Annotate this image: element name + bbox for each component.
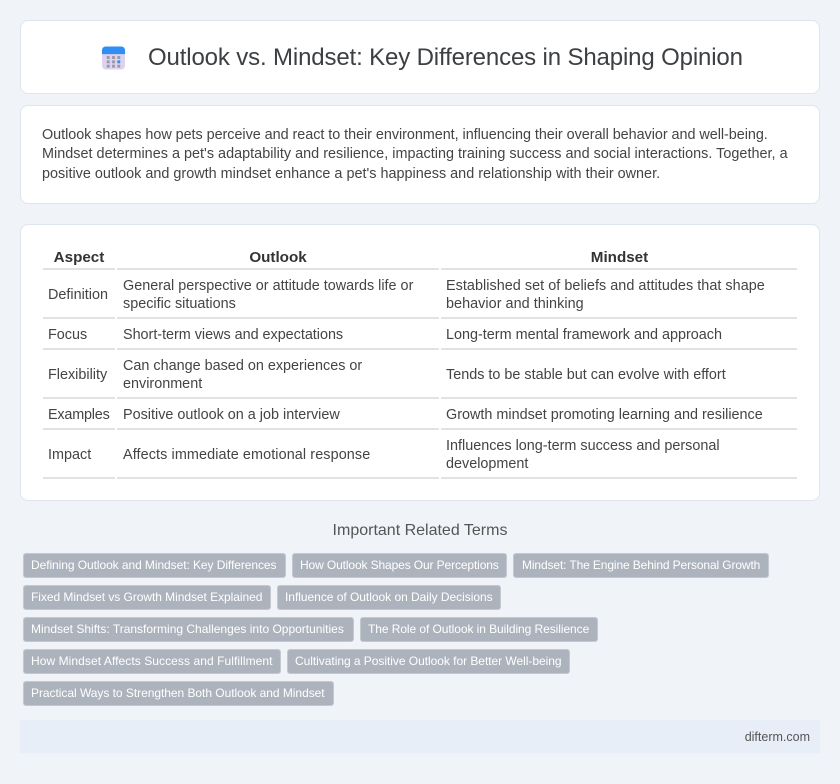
table rows: Short-term views and expectations: [123, 327, 343, 343]
table rows: Examples: [48, 407, 110, 423]
related term tags: Fixed Mindset vs Growth Mindset Explained: [31, 590, 262, 604]
table header: Aspect: [54, 249, 104, 266]
footer bar: [20, 720, 820, 753]
description text: [42, 127, 788, 182]
table rows: specific situations: [123, 296, 236, 312]
related term tags: Influence of Outlook on Daily Decisions: [285, 590, 493, 604]
table rows: Established set of beliefs and attitudes that shape: [446, 278, 765, 294]
related term tags: How Mindset Affects Success and Fulfillment: [31, 654, 273, 668]
related term tags: The Role of Outlook in Building Resilience: [368, 622, 589, 636]
table rows: Long-term mental framework and approach: [446, 327, 722, 343]
icon: calendar: [102, 46, 126, 70]
related term tags: Mindset: The Engine Behind Personal Growth: [522, 558, 760, 572]
table header: [54, 249, 648, 266]
table rows: Influences long-term success and personal: [446, 438, 720, 454]
related terms heading: Important Related Terms: [333, 522, 507, 539]
title: Outlook vs. Mindset: Key Differences in Shaping Opinion: [148, 44, 743, 71]
comparison table panel: [20, 224, 820, 501]
description panel: [20, 105, 820, 204]
table rows: Tends to be stable but can evolve with effort: [446, 367, 726, 383]
table rows: environment: [123, 376, 202, 392]
table rows: Positive outlook on a job interview: [123, 407, 340, 423]
table rows: development: [446, 456, 528, 472]
description text: positive outlook and growth mindset enhance a pet's happiness and relationship with their owner.: [42, 166, 660, 182]
related term tags: Mindset Shifts: Transforming Challenges into Opportunities: [31, 622, 344, 636]
table rows: General perspective or attitude towards life or: [123, 278, 413, 294]
description text: Mindset determines a pet's adaptability and resilience, impacting training success and social interactions. Together, a: [42, 146, 788, 162]
table rows: Impact: [48, 447, 91, 463]
related term tags: [23, 553, 769, 706]
table header: Outlook: [249, 249, 307, 266]
table rows: Focus: [48, 327, 87, 343]
table rows: Affects immediate emotional response: [123, 447, 370, 463]
table rows: Definition: [48, 287, 108, 303]
table rows: Can change based on experiences or: [123, 358, 362, 374]
description text: Outlook shapes how pets perceive and react to their environment, influencing their overall behavior and well-being.: [42, 127, 768, 143]
related term tags: Practical Ways to Strengthen Both Outlook and Mindset: [31, 686, 325, 700]
table rows: Growth mindset promoting learning and resilience: [446, 407, 763, 423]
related term tags: Cultivating a Positive Outlook for Better Well-being: [295, 654, 562, 668]
related term tags: Defining Outlook and Mindset: Key Differences: [31, 558, 276, 572]
table rows: [43, 268, 797, 479]
footer source: difterm.com: [745, 730, 810, 744]
table rows: behavior and thinking: [446, 296, 584, 312]
related term tags: How Outlook Shapes Our Perceptions: [300, 558, 499, 572]
table rows: Flexibility: [48, 367, 107, 383]
table header: Mindset: [591, 249, 648, 266]
header panel: [20, 20, 820, 94]
